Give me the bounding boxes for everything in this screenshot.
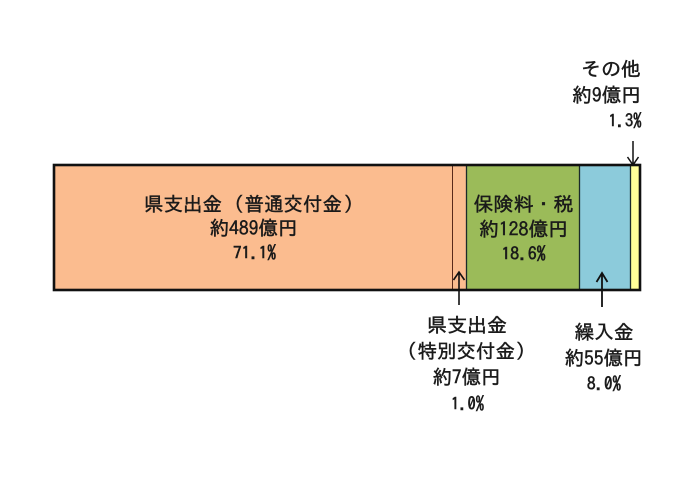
segment: insurance premiums and tax (466, 165, 579, 290)
label: prefectural disbursement (special): 1.0% (451, 395, 484, 413)
label: transfers: 約55億円 (564, 348, 642, 368)
segment: other (630, 165, 640, 290)
arrow: to transfers segment (596, 273, 608, 307)
label: prefectural disbursement (ordinary): 県支出金 (144, 194, 222, 214)
label: prefectural disbursement (ordinary): （ (224, 194, 244, 214)
arrow: to other segment (628, 141, 638, 165)
segment: prefectural disbursement (special) (452, 165, 466, 290)
label: prefectural disbursement (ordinary): 約489億円 (210, 218, 298, 238)
segment: transfers (579, 165, 630, 290)
arrow: to special disbursement segment (454, 272, 464, 305)
label: transfers (564, 323, 642, 393)
label: prefectural disbursement (special): （ (397, 341, 416, 361)
stacked bar chart (54, 165, 640, 290)
label: insurance premiums and tax: 保険料・税 (474, 194, 574, 214)
label: other: 1.3% (608, 112, 642, 130)
label: prefectural disbursement (special) (397, 315, 536, 413)
label: insurance premiums and tax (474, 194, 574, 263)
label: other: その他 (581, 60, 641, 79)
label: transfers: 繰入金 (574, 323, 634, 342)
label: prefectural disbursement (ordinary): ） (344, 194, 364, 214)
label: other: 約9億円 (572, 85, 641, 105)
label: prefectural disbursement (special): 約7億円 (432, 367, 500, 387)
label: insurance premiums and tax: 18.6% (502, 245, 546, 263)
segment: prefectural disbursement (ordinary) (54, 165, 452, 290)
label: prefectural disbursement (ordinary): 71.1% (233, 244, 276, 262)
label: prefectural disbursement (ordinary): 普通交付金 (244, 194, 342, 214)
label: prefectural disbursement (special): 県支出金 (427, 315, 507, 335)
label: prefectural disbursement (special): 特別交付金 (418, 341, 515, 361)
label: other (572, 60, 642, 130)
label: prefectural disbursement (special): ） (516, 341, 536, 361)
label: insurance premiums and tax: 約128億円 (479, 219, 568, 239)
label: transfers: 8.0% (587, 375, 621, 393)
label: prefectural disbursement (ordinary) (144, 194, 364, 262)
